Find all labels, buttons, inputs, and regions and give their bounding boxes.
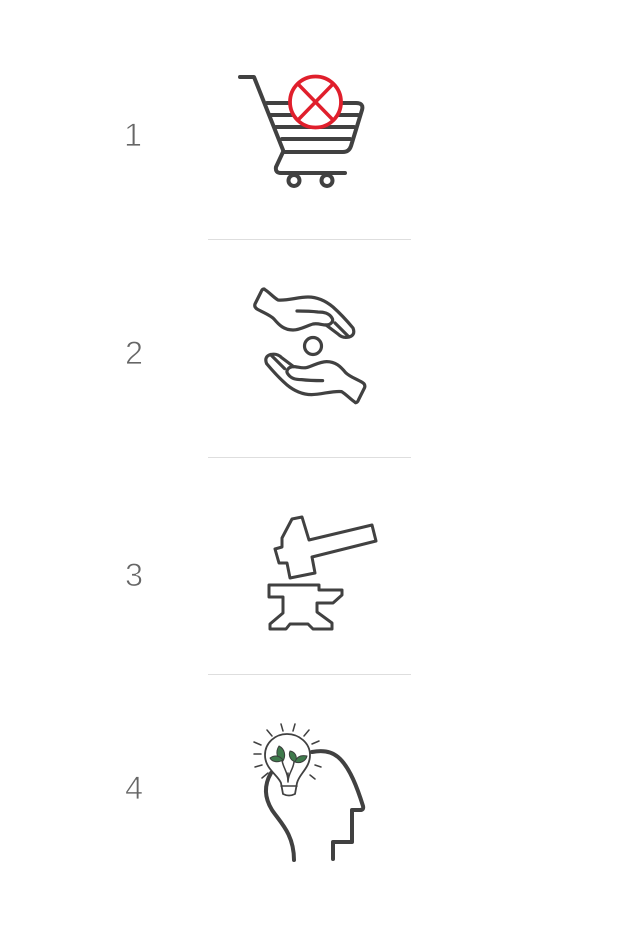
number 1: 1 xyxy=(124,117,142,153)
top hand xyxy=(255,289,354,337)
bottom hand xyxy=(266,354,365,403)
coin xyxy=(304,338,322,354)
number 4: 4 xyxy=(125,770,143,806)
hammer xyxy=(275,517,376,578)
icon: head with lightbulb and plant xyxy=(254,724,363,860)
icon: two hands protecting a coin xyxy=(255,289,365,403)
plant xyxy=(282,760,294,781)
icon: red cross circle xyxy=(290,76,341,128)
number 3: 3 xyxy=(125,557,143,593)
icon: shopping cart with red cross xyxy=(240,76,362,186)
head outline xyxy=(312,751,363,859)
icon: hammer and anvil xyxy=(269,517,376,629)
anvil xyxy=(269,585,342,629)
number 2: 2 xyxy=(125,335,143,371)
leaves xyxy=(270,746,307,763)
light rays xyxy=(254,724,321,779)
lightbulb xyxy=(265,734,310,796)
